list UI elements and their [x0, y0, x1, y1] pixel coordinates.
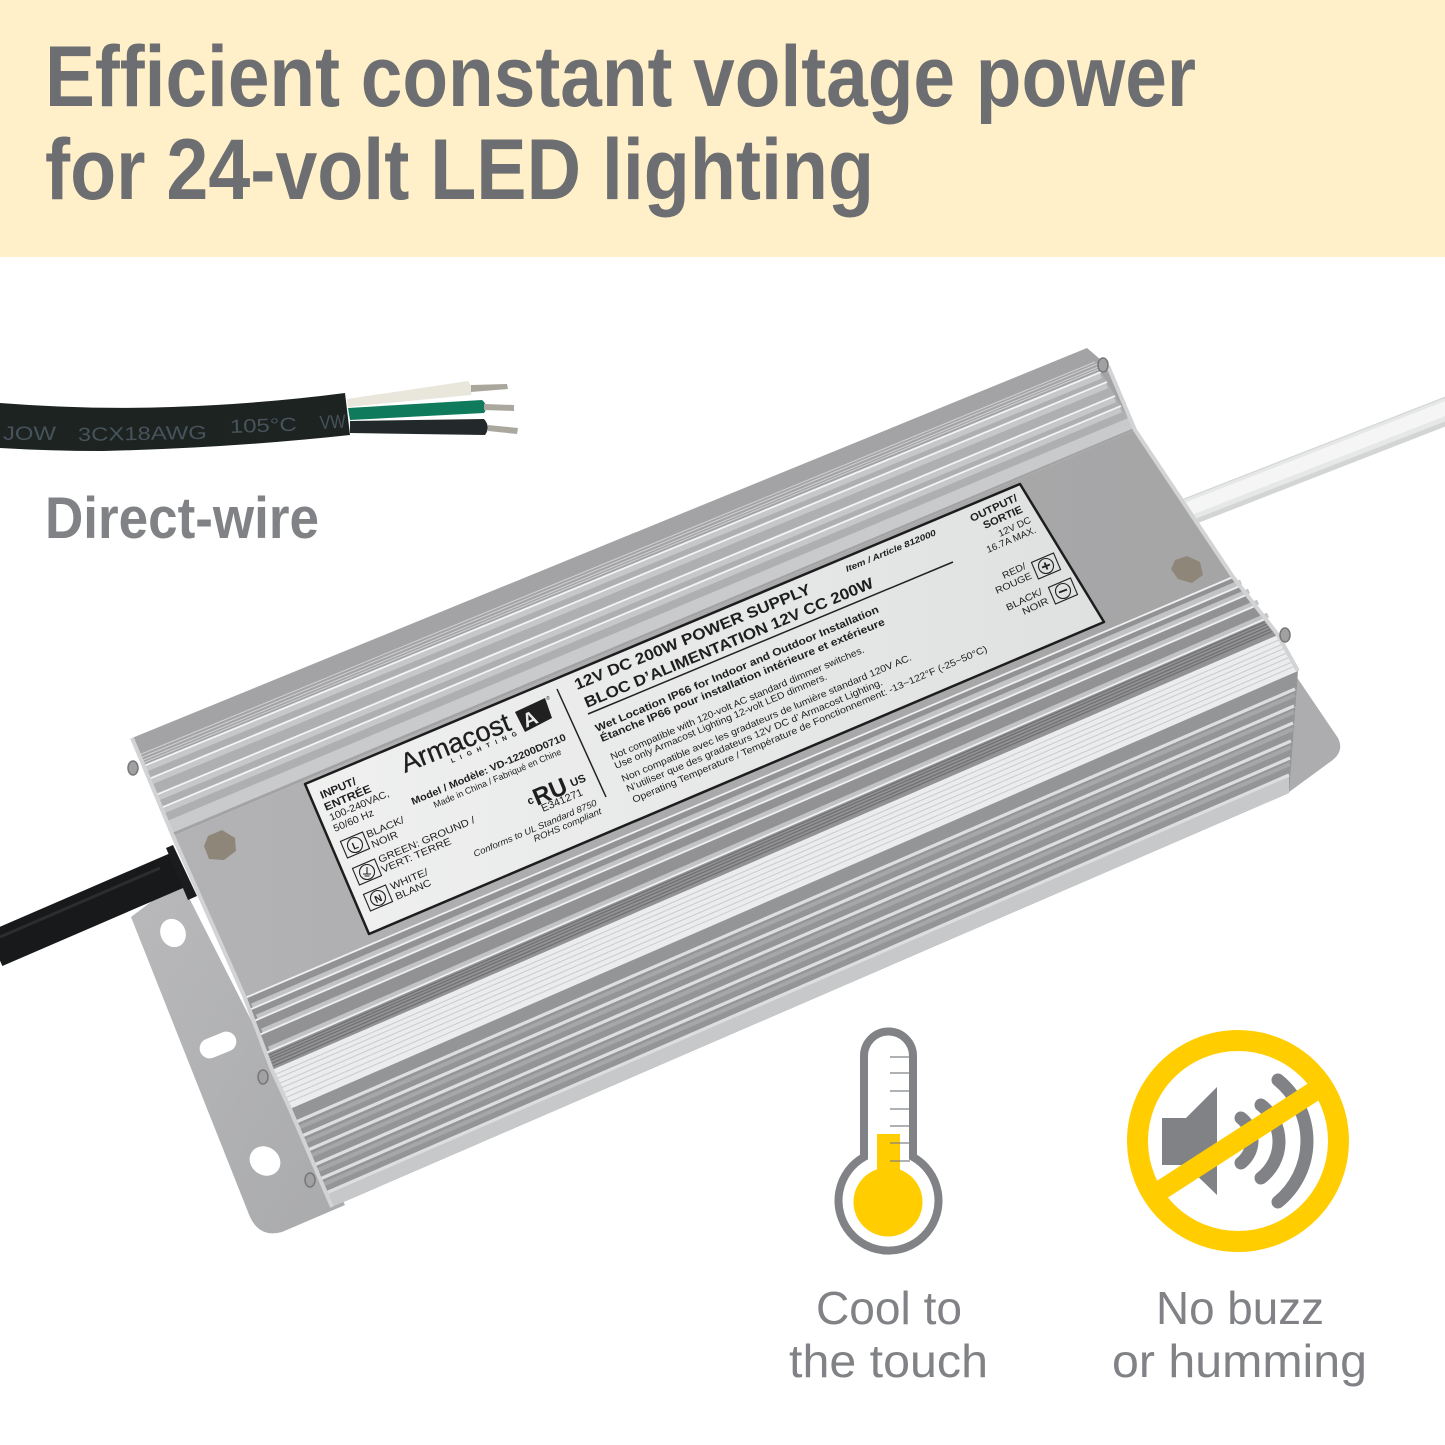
input wiring text: BLACK/: [365, 815, 406, 841]
input wiring text: GREEN: GROUND /: [377, 815, 477, 866]
label headline: BLOC D’ALIMENTATION 12V CC 200W: [582, 575, 877, 712]
caption: cool to the touch: Cool to: [816, 1282, 962, 1334]
model text: Model / Modèle: VD-12200D0710: [410, 732, 568, 808]
specification text: Use only Armacost Lighting 12-volt LED dimmers.: [613, 672, 829, 772]
specification text: Operating Temperature / Température de Fonctionnement: -13~122°F (-25~50°C): [631, 644, 989, 806]
screws: [128, 358, 1290, 1187]
specification text: Wet Location IP66 for Indoor and Outdoor Installation: [593, 604, 881, 735]
caption: no buzz or humming: No buzz: [1156, 1282, 1324, 1334]
item number: Item / Article 812000: [844, 527, 938, 574]
title: Efficient constant voltage power: [45, 29, 1196, 125]
input wiring text: VERT: TERRE: [380, 836, 454, 876]
output wiring text: OUTPUT/: [968, 492, 1020, 525]
output wiring text: 16.7A MAX.: [985, 525, 1038, 556]
model text: RU: [529, 773, 572, 812]
model text: US: [568, 772, 588, 790]
middle heat-sink ribs: [245, 577, 1278, 1070]
output wiring text: NOIR: [1021, 596, 1051, 618]
specification text: N’utiliser que des gradateurs 12V DC d’ Armacost Lighting.: [625, 677, 885, 795]
hex rivets: [204, 556, 1203, 860]
label headline: 12V DC 200W POWER SUPPLY: [572, 581, 814, 694]
product label: [305, 484, 1104, 934]
input wiring text: 100-240VAC,: [328, 789, 391, 824]
specification text: Not compatible with 120-volt AC standard dimmer switches.: [609, 645, 866, 763]
model text: [410, 732, 603, 859]
input wiring text: BLANC: [394, 878, 433, 903]
input wiring text: INPUT/: [318, 776, 358, 802]
output wiring text: 12V DC: [997, 515, 1033, 540]
direct-wire cable photo: 105°C: [229, 415, 297, 438]
model text: Made in China / Fabriqué en Chine: [432, 747, 563, 810]
brand logo: Armacost: [396, 707, 515, 779]
input wiring text: WHITE/: [389, 867, 430, 893]
direct-wire cable photo: [0, 381, 518, 451]
black input cable: [0, 845, 197, 949]
input wiring text: [318, 776, 477, 911]
title: for 24-volt LED lighting: [45, 122, 874, 218]
white output cable: [1180, 395, 1445, 515]
caption: cool to the touch: [789, 1282, 988, 1387]
title: [45, 29, 1196, 218]
caption: cool to the touch: the touch: [789, 1335, 988, 1387]
right mounting flange: [1200, 676, 1340, 795]
top heat-sink ribs: [132, 348, 1135, 836]
icon: thermometer: [839, 1032, 939, 1251]
output wiring text: [968, 492, 1078, 618]
input wiring text: 50/60 Hz: [332, 808, 376, 835]
headline rule: [588, 562, 953, 714]
model text: ROHS compliant: [532, 806, 603, 844]
caption: no buzz or humming: or humming: [1112, 1335, 1367, 1387]
brand logo: ®: [546, 695, 550, 702]
input wiring text: ENTRÉE: [322, 782, 373, 814]
input wiring text: N: [373, 893, 384, 906]
icon: no sound: [1138, 1040, 1338, 1242]
power supply: [0, 348, 1340, 1233]
flange holes: [156, 915, 286, 1182]
brand logo: LIGHTING: [450, 731, 518, 765]
brand logo: [396, 695, 552, 779]
specification text: [593, 604, 989, 806]
flat label plate: [173, 430, 1233, 998]
input wiring text: L: [351, 840, 361, 853]
brand logo: A: [519, 707, 541, 733]
lower heat-sink ribs: [290, 671, 1298, 1207]
direct-wire label: Direct-wire: [45, 486, 319, 551]
direct-wire cable photo: VW: [319, 412, 346, 434]
white aluminium strip: [272, 635, 1298, 1109]
output wiring text: SORTIE: [981, 504, 1025, 532]
header banner: [0, 0, 1445, 257]
input wiring text: NOIR: [370, 830, 400, 851]
model text: Conforms to UL Standard 8750: [472, 798, 598, 859]
caption: no buzz or humming: [1112, 1282, 1367, 1387]
specification text: Non compatible avec les gradateurs de lumière standard 120V AC.: [620, 652, 913, 785]
output wiring text: ROUGE: [994, 571, 1034, 597]
body side edges: [132, 366, 1298, 1207]
specification text: Étanche IP66 pour installation intérieure et extérieure: [598, 615, 887, 745]
model text: E341271: [539, 786, 585, 815]
model text: c: [525, 794, 536, 808]
output wiring text: BLACK/: [1004, 587, 1045, 614]
direct-wire cable photo: 3CX18AWG: [78, 423, 207, 446]
label divider: [557, 689, 606, 797]
left mounting flange: [131, 880, 345, 1233]
output wiring text: RED/: [1001, 561, 1028, 582]
direct-wire cable photo: JOW: [3, 424, 56, 445]
